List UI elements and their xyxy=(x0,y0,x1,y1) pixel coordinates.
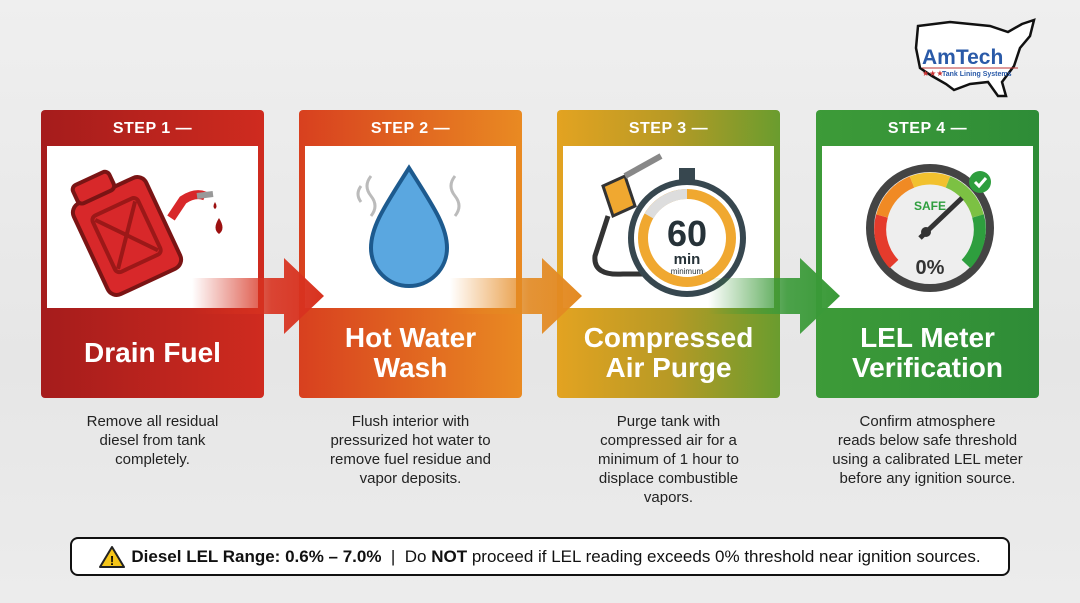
icon: gauge xyxy=(822,146,1033,308)
title: LEL Meter xyxy=(860,322,995,353)
description 2: Flush interior with xyxy=(352,413,469,430)
description 2 xyxy=(330,413,491,487)
card 2: STEP 2 — xyxy=(371,120,450,137)
description 4: before any ignition source. xyxy=(840,470,1015,487)
title: Hot Water xyxy=(345,322,476,353)
warning bar: NOT xyxy=(431,546,467,566)
description 4: using a calibrated LEL meter xyxy=(832,451,1023,468)
icon: gauge: 0% xyxy=(916,257,945,279)
icon: gauge: SAFE xyxy=(914,199,946,213)
description 3: minimum of 1 hour to xyxy=(598,451,739,468)
description 1: Remove all residual xyxy=(87,413,218,430)
card 1 xyxy=(41,110,264,398)
warning bar: | Do proceed if LEL reading exceeds 0% threshold near ignition sources. xyxy=(391,546,981,566)
icon: warning: ! xyxy=(110,552,115,568)
logo xyxy=(914,18,1036,98)
title xyxy=(584,322,753,383)
icon: fuel can xyxy=(47,146,258,308)
card 3 xyxy=(557,110,780,398)
description 2: remove fuel residue and xyxy=(330,451,491,468)
description 2: vapor deposits. xyxy=(360,470,461,487)
arrow 2 xyxy=(453,258,582,334)
title xyxy=(345,322,476,383)
description 4: reads below safe threshold xyxy=(838,432,1017,449)
icon: stopwatch and nozzle: min xyxy=(674,251,700,268)
warning bar: Diesel LEL Range: 0.6% – 7.0% xyxy=(131,546,381,566)
title: Drain Fuel xyxy=(84,337,221,368)
card 4 xyxy=(816,110,1039,398)
description 4 xyxy=(832,413,1023,487)
description 1: completely. xyxy=(115,451,190,468)
description 3 xyxy=(598,413,739,506)
arrow 3 xyxy=(712,258,840,334)
description 3: compressed air for a xyxy=(600,432,737,449)
card 2 xyxy=(299,110,522,398)
description 3: Purge tank with xyxy=(617,413,720,430)
logo: Tank Lining Systems xyxy=(942,71,1012,78)
description 3: vapors. xyxy=(644,489,693,506)
description 1: diesel from tank xyxy=(100,432,205,449)
title: Compressed xyxy=(584,322,753,353)
description 4: Confirm atmosphere xyxy=(860,413,995,430)
title xyxy=(852,322,1003,383)
logo: ★★★ xyxy=(922,69,944,78)
title: Air Purge xyxy=(605,352,732,383)
title: Verification xyxy=(852,352,1003,383)
card 1: STEP 1 — xyxy=(113,120,192,137)
description 1 xyxy=(87,413,218,468)
icon: stopwatch and nozzle xyxy=(563,146,774,308)
icon: warning xyxy=(99,546,125,568)
icon: stopwatch and nozzle: 60 xyxy=(667,213,707,254)
warning bar xyxy=(70,537,1010,576)
card 4: STEP 4 — xyxy=(888,120,967,137)
description 2: pressurized hot water to xyxy=(330,432,491,449)
arrow 1 xyxy=(195,258,324,334)
logo: AmTech xyxy=(922,46,1003,69)
icon: stopwatch and nozzle: minimum xyxy=(671,267,704,276)
card 3: STEP 3 — xyxy=(629,120,708,137)
icon: water drop xyxy=(305,146,516,308)
description 3: displace combustible xyxy=(599,470,738,487)
title: Wash xyxy=(374,352,447,383)
